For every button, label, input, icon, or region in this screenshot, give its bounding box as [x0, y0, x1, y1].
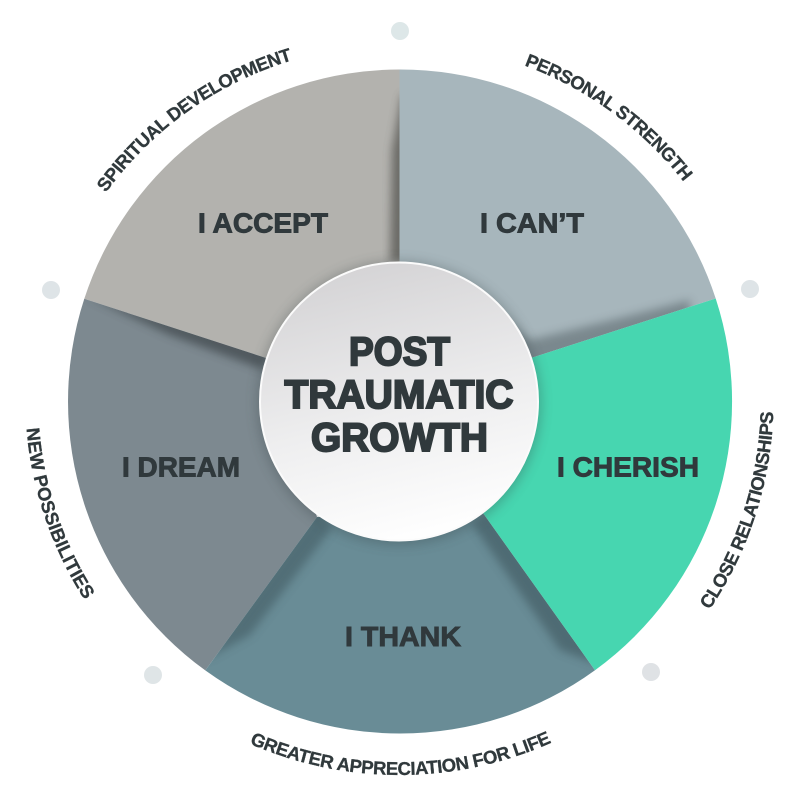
panel: I dream segment	[68, 295, 317, 670]
label: I accept: I ACCEPT	[198, 208, 328, 238]
title: post traumatic growth: POST	[349, 330, 450, 374]
label: I thank: I THANK	[345, 621, 461, 652]
title: post traumatic growth	[284, 330, 514, 460]
curved label: spiritual development: SPIRITUAL DEVELOPMENT	[98, 48, 290, 191]
label: I dream: I DREAM	[122, 452, 240, 482]
panel: I cherish segment	[483, 298, 732, 670]
curved label: greater appreciation for life: GREATER APPRECIATION FOR LIFE	[252, 731, 552, 776]
title: post traumatic growth: GROWTH	[311, 416, 488, 460]
panel: I accept segment	[84, 70, 410, 358]
title: post traumatic growth: TRAUMATIC	[284, 373, 514, 417]
panel: I can't segment	[400, 69, 716, 380]
panel: I thank segment	[205, 510, 600, 733]
central hub circle	[257, 261, 541, 545]
curved label: personal strength: PERSONAL STRENGTH	[525, 54, 693, 182]
curved label: close relationships: CLOSE RELATIONSHIPS	[701, 412, 774, 608]
label: I cherish: I CHERISH	[557, 452, 699, 482]
curved label: new possibilities: NEW POSSIBILITIES	[26, 428, 94, 598]
label: I can't: I CAN’T	[480, 208, 584, 238]
decorative marker dots	[42, 22, 759, 684]
